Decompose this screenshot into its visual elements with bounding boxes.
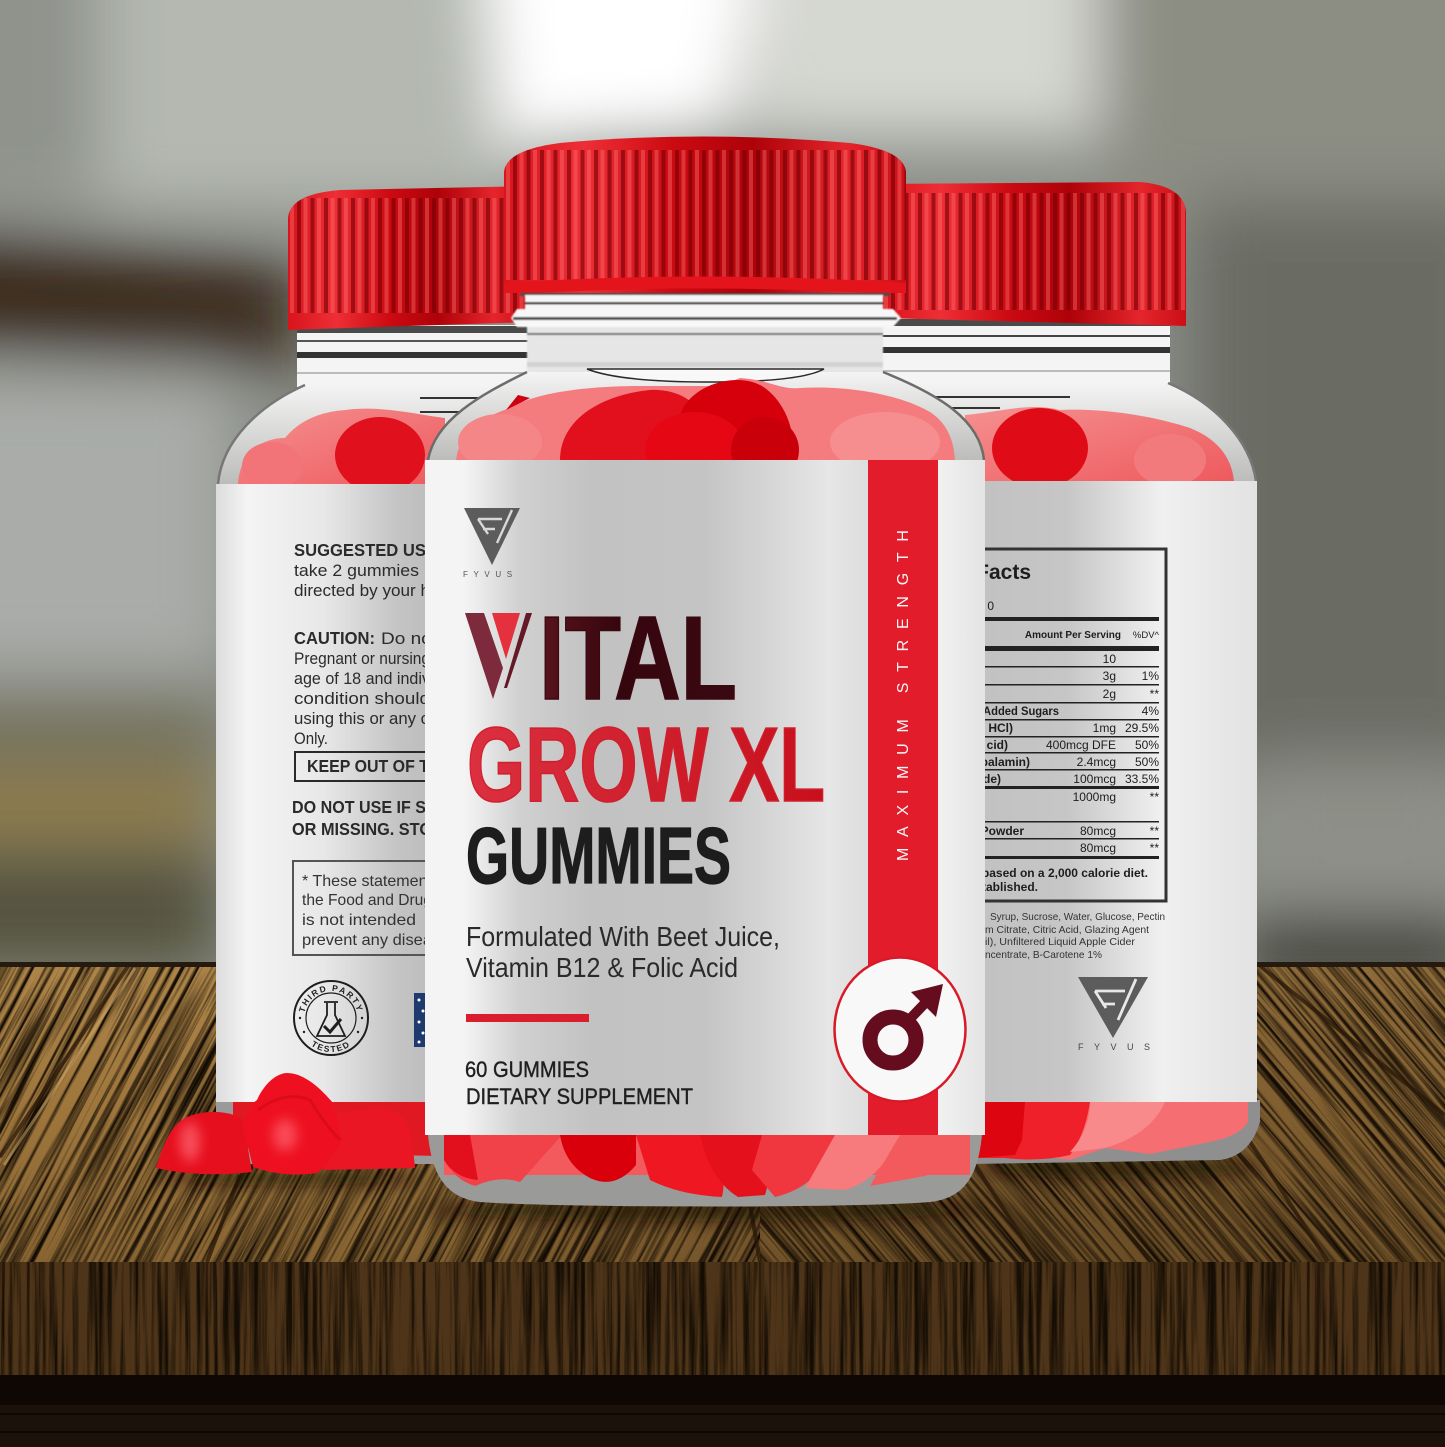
subtitle: Formulated With Beet Juice, — [466, 921, 780, 952]
table underside — [0, 1375, 1445, 1447]
supplement facts panel: 100mcg — [1073, 772, 1116, 786]
gummy: right — [323, 1108, 415, 1170]
plank seams — [0, 966, 1445, 1376]
maximum strength text: MAXIMUM STRENGTH — [895, 525, 912, 861]
table front face — [0, 1262, 1445, 1376]
disclaimer box: * These statement — [302, 873, 433, 890]
back left bottle — [177, 146, 580, 1204]
supplement facts panel: 2g — [1103, 687, 1116, 701]
count and type: 60 GUMMIES — [465, 1057, 589, 1082]
usage text: directed by your h — [294, 582, 430, 600]
supplement facts panel: palamin) — [981, 755, 1030, 769]
label — [216, 484, 436, 1102]
supplement facts panel — [975, 549, 1166, 901]
front bottle — [425, 130, 985, 1206]
supplement facts panel: Powder — [981, 824, 1024, 838]
wooden table — [0, 960, 1445, 1447]
icon: fyvus logo: FYVUS — [463, 570, 518, 579]
title: grow xl: GROW XL — [467, 706, 825, 824]
supplement facts panel: ** — [1150, 841, 1159, 855]
title: vital: ITAL — [539, 592, 737, 725]
icon: usa flag fragment — [414, 993, 428, 1047]
supplement facts panel: HCl) — [988, 721, 1013, 735]
disclaimer box: is not intended — [302, 912, 416, 929]
supplement facts panel: cid) — [987, 738, 1008, 752]
icon: fyvus logo — [463, 508, 520, 579]
cap — [288, 186, 530, 332]
label — [975, 481, 1257, 1102]
gummies top — [456, 378, 955, 460]
keep out box — [295, 752, 445, 781]
table shadows — [155, 1158, 1265, 1221]
blurred room background — [0, 0, 1445, 980]
ingredients text: m Citrate, Citric Acid, Glazing Agent — [985, 924, 1149, 936]
gummy: left — [156, 1112, 252, 1174]
usage text: Do not — [381, 630, 437, 648]
back right bottle — [870, 180, 1260, 1164]
supplement facts panel: 80mcg — [1080, 824, 1116, 838]
supplement facts panel: Amount Per Serving — [1025, 630, 1121, 641]
neck and glass — [428, 286, 984, 460]
title: vital — [465, 592, 737, 725]
supplement facts panel: 1mg — [1093, 721, 1116, 735]
gummies top — [965, 407, 1234, 488]
title: gummies: GUMMIES — [466, 811, 731, 900]
disclaimer box — [293, 861, 443, 955]
neck and glass — [870, 318, 1256, 481]
usage text: Pregnant or nursing — [294, 650, 430, 668]
loose gummies — [156, 1073, 415, 1175]
icon: third party tested badge: THIRD PARTY — [298, 985, 363, 1012]
icon: third party tested badge — [293, 980, 369, 1056]
do not use warning: OR MISSING. STO — [292, 819, 432, 839]
supplement facts panel: 29.5% — [1125, 721, 1159, 735]
bottom gummies — [970, 1100, 1260, 1164]
usage text: using this or any o — [294, 710, 430, 728]
supplement facts panel: %DV^ — [1133, 630, 1160, 641]
supplement facts panel: 2.4mcg — [1077, 755, 1116, 769]
supplement facts panel: 0 — [987, 599, 994, 613]
supplement facts panel: 50% — [1135, 738, 1159, 752]
supplement facts panel: 400mcg DFE — [1046, 738, 1116, 752]
usage text: Only. — [294, 730, 328, 748]
supplement facts panel: 10 — [1103, 652, 1116, 666]
ingredients text: ncentrate, B-Carotene 1% — [985, 949, 1102, 961]
label — [425, 460, 985, 1135]
icon: third party tested badge: TESTED — [312, 1040, 348, 1052]
cap — [504, 130, 906, 295]
disclaimer box: the Food and Drug — [302, 892, 432, 909]
usage text: CAUTION: — [294, 628, 375, 648]
red divider — [466, 1014, 589, 1022]
supplement facts panel: ** — [1150, 790, 1159, 804]
supplement facts panel: 80mcg — [1080, 841, 1116, 855]
supplement facts panel: Added Sugars — [983, 704, 1059, 718]
usage text: age of 18 and indiv — [294, 670, 431, 688]
usage text: take 2 gummies — [294, 562, 419, 580]
gummy: center — [243, 1073, 342, 1175]
supplement facts panel: 3g — [1103, 669, 1116, 683]
do not use warning — [292, 797, 432, 839]
do not use warning: DO NOT USE IF S — [292, 797, 426, 817]
subtitle — [466, 921, 780, 983]
count and type — [465, 1057, 693, 1109]
cap — [880, 180, 1186, 328]
usage text — [294, 540, 437, 748]
bottom gummies — [216, 1100, 440, 1164]
subtitle: Vitamin B12 & Folic Acid — [466, 952, 738, 983]
supplement facts panel: 1% — [1142, 669, 1159, 683]
supplement facts panel: 1000mg — [1073, 790, 1116, 804]
gummies bottom — [428, 1135, 982, 1206]
gummies top — [238, 408, 445, 484]
icon: fyvus logo: FYVUS — [1078, 1042, 1161, 1052]
supplement facts panel: 4% — [1142, 704, 1159, 718]
supplement facts panel: ** — [1150, 687, 1159, 701]
supplement facts panel: tablished. — [982, 880, 1038, 894]
supplement facts panel: based on a 2,000 calorie diet. — [982, 866, 1148, 880]
ingredients text: il), Unfiltered Liquid Apple Cider — [985, 936, 1136, 948]
supplement facts panel: Facts — [976, 561, 1031, 584]
usage text: SUGGESTED US — [294, 540, 426, 560]
supplement facts panel: 50% — [1135, 755, 1159, 769]
supplement facts panel: ** — [1150, 824, 1159, 838]
disclaimer box: prevent any disea — [302, 932, 432, 949]
red vertical stripe — [868, 460, 938, 1135]
keep out box: KEEP OUT OF T — [307, 756, 429, 776]
table top surface — [0, 960, 1445, 1270]
supplement facts panel: 33.5% — [1125, 772, 1159, 786]
count and type: DIETARY SUPPLEMENT — [466, 1084, 693, 1109]
ingredients text — [985, 911, 1165, 961]
icon: fyvus logo — [1078, 977, 1161, 1052]
neck and glass — [218, 325, 540, 484]
supplement facts panel: de) — [983, 772, 1001, 786]
ingredients text: Syrup, Sucrose, Water, Glucose, Pectin — [990, 911, 1165, 923]
icon: male symbol badge — [834, 958, 966, 1102]
usage text: condition should — [294, 690, 430, 708]
